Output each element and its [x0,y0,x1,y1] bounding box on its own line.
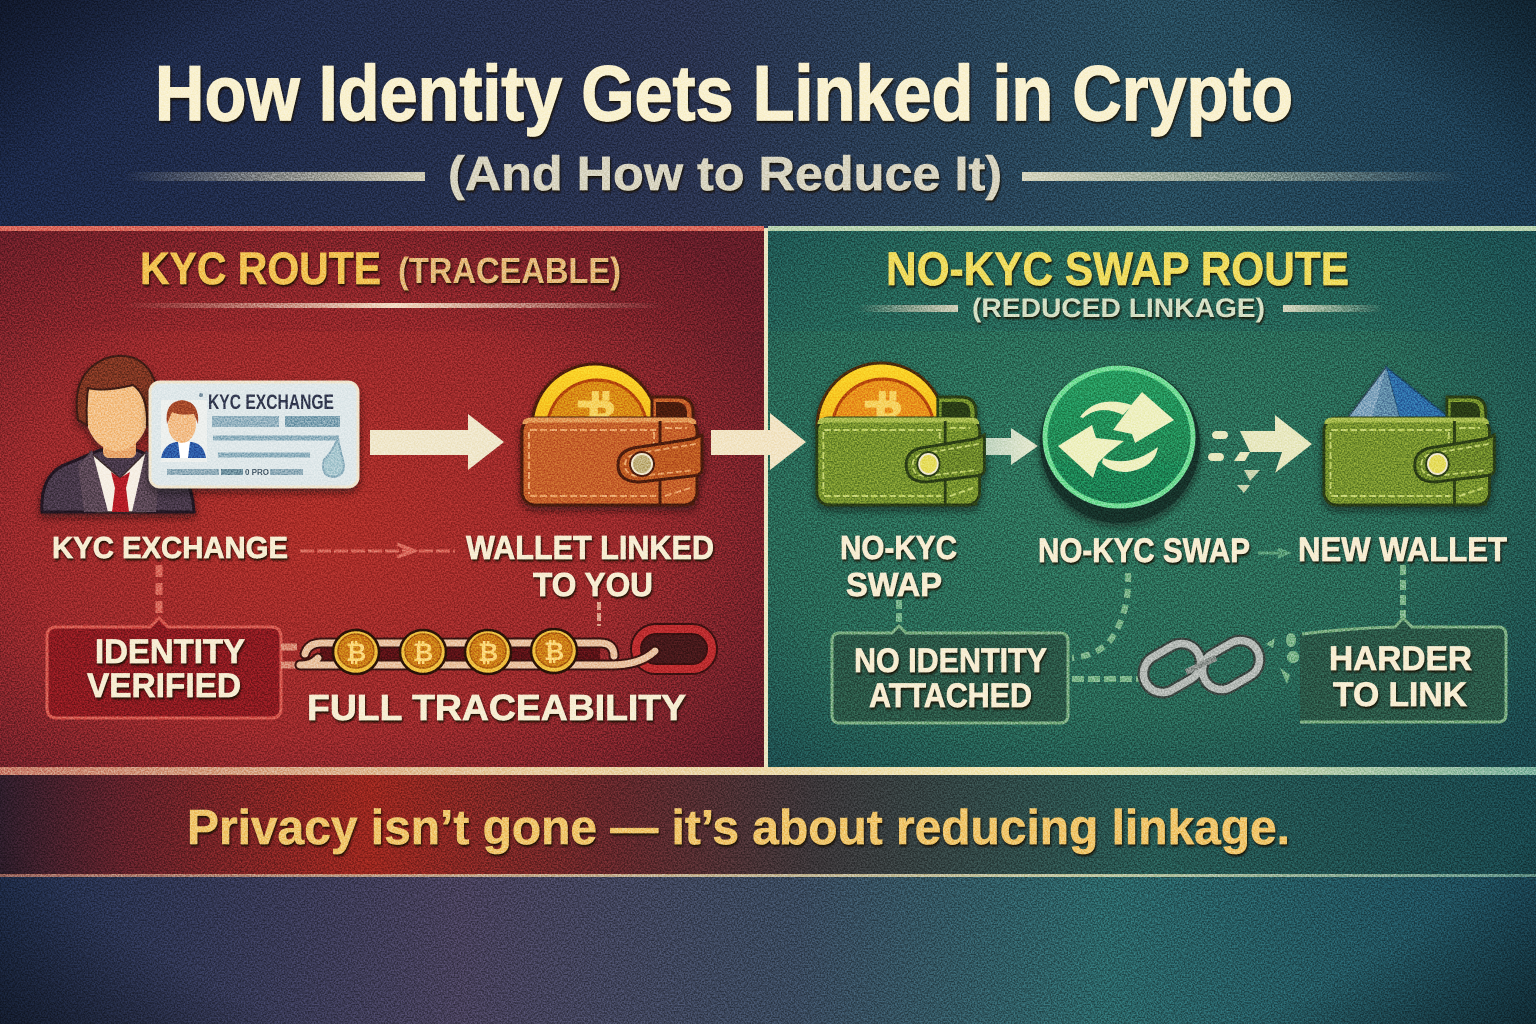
background: bottom navy area [0,875,1536,1024]
label: full traceability: FULL TRACEABILITY [307,687,686,728]
callout: harder to link: HARDER [1329,640,1472,678]
connector: wallet to chain [597,602,601,626]
background: top navy area [0,0,1536,228]
subheading: reduced linkage: (REDUCED LINKAGE) [972,293,1265,323]
ID card title text: KYC EXCHANGE [208,391,334,414]
icon: swap button [1040,365,1200,523]
red chain link [636,629,712,669]
subheading: reduced linkage [858,293,1383,323]
label: wallet linked to you: WALLET LINKED [466,529,714,566]
label: no-KYC swap (wallet): NO-KYC [840,529,957,566]
icon: orange wallet with bitcoin [522,364,702,505]
swap arrows [1058,392,1174,478]
icon: person in suit [42,356,194,512]
heading: KYC route: KYC ROUTE [140,243,381,294]
label: no-KYC swap (wallet) [840,529,957,603]
connector: exchange to identity box [156,565,162,618]
footer band [0,767,1536,877]
arrow: wallet to swap [986,428,1038,465]
link fragments [1266,633,1299,684]
heading: No-KYC swap route: NO-KYC SWAP ROUTE [886,242,1349,295]
icon: broken grey chain link [1137,634,1266,699]
chain with bitcoin coins [281,629,712,674]
callout: no identity attached [832,626,1068,723]
callout: identity verified: VERIFIED [87,667,241,705]
arrow: wallet to no-KYC panel [711,413,806,470]
label: wallet linked to you [466,529,714,603]
callout: identity verified: IDENTITY [95,633,245,671]
connector: swap label to no-identity box [1072,573,1128,658]
arrow: dashed swap to new wallet [1208,415,1312,493]
title: How Identity Gets Linked in Crypto [155,49,1293,137]
icon: green wallet with diamond token [1324,367,1494,505]
label: KYC exchange: KYC EXCHANGE [52,530,288,565]
heading: KYC route: (TRACEABLE) [398,250,621,291]
icon: KYC ID card [150,382,358,487]
label: no-KYC swap: NO-KYC SWAP [1038,532,1250,570]
connector: no-identity box to chain link [1072,676,1140,682]
icon: green wallet with bitcoin [817,363,984,505]
connector: new wallet to harder-to-link box [1400,565,1406,618]
panel: KYC route [0,226,764,768]
subtitle: (And How to Reduce It) [448,148,1002,201]
callout: harder to link [1300,618,1506,722]
heading: KYC route [140,243,621,294]
panel: No-KYC swap route [764,226,1536,768]
callout: no identity attached: ATTACHED [869,677,1032,715]
label: wallet linked to you: TO YOU [533,566,653,603]
icon: KYC ID card: 0 PRO [245,468,269,477]
arrow: dashed label link [300,544,455,557]
callout: identity verified [47,618,281,718]
label: new wallet: NEW WALLET [1298,531,1507,569]
arrow: exchange to wallet [370,414,504,470]
connector: wallet label to no-identity box [896,600,902,626]
callout: no identity attached: NO IDENTITY [854,642,1047,680]
arrow: swap to new wallet label [1258,549,1288,557]
takeaway text: Privacy isn’t gone — it’s about reducing linkage. [187,801,1290,855]
label: no-KYC swap (wallet): SWAP [846,566,942,603]
callout: harder to link: TO LINK [1333,676,1467,714]
subtitle [125,148,1462,201]
